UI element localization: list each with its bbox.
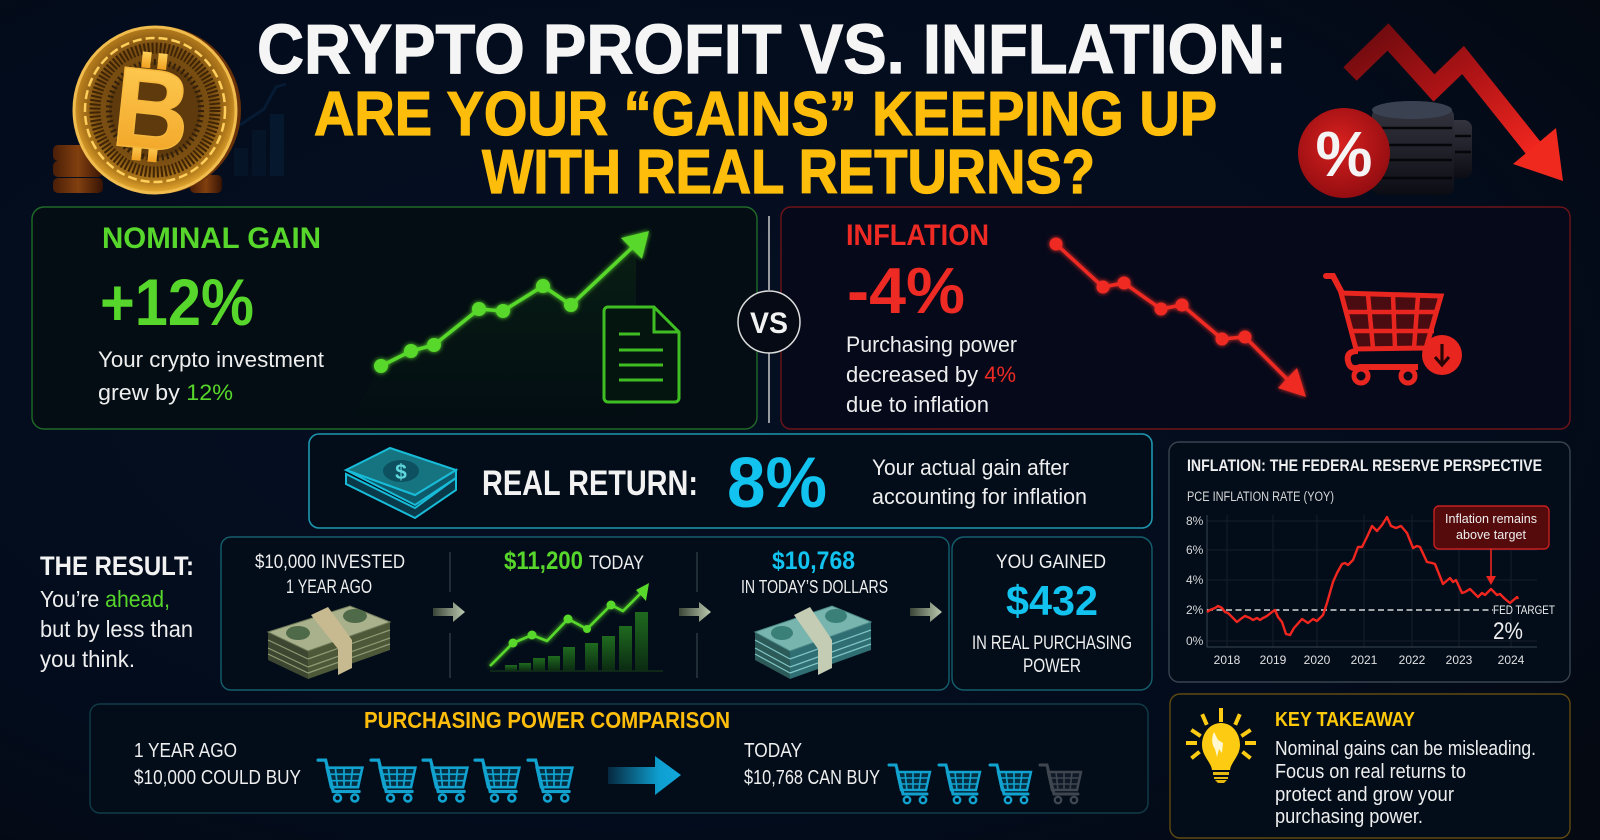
step: today's dollars: IN TODAY’S DOLLARS (741, 577, 888, 597)
chart: PCE line: 4% (1186, 573, 1204, 587)
chart: falling red line (1050, 238, 1306, 397)
header illustration: falling inflation (1298, 37, 1563, 198)
text: description (98, 347, 324, 405)
arrow: step one (433, 602, 465, 622)
number: -4%: -4% (847, 254, 965, 327)
text: chart subtitle: PCE INFLATION RATE (YOY) (1187, 489, 1334, 504)
icon: teal cash stack (755, 606, 871, 679)
label: real return: REAL RETURN: (482, 464, 698, 503)
number: $432: $432 (1006, 577, 1098, 624)
panel: inflation (781, 207, 1570, 429)
icon: green cash stack (268, 606, 390, 679)
text: today: $10,768 CAN BUY (744, 767, 880, 789)
callout: inflation remains above target: Inflation remains (1445, 512, 1537, 526)
text: description: Your crypto investment (98, 347, 324, 372)
heading: purchasing power: PURCHASING POWER COMPARISON (364, 707, 730, 733)
panel: real return (309, 434, 1152, 528)
text: takeaway body: Focus on real returns to (1275, 761, 1466, 783)
chart: PCE line: 2024 (1498, 653, 1525, 667)
chart: PCE line: 2020 (1304, 653, 1331, 667)
heading: nominal gain: NOMINAL GAIN (102, 222, 321, 255)
icon: document (604, 307, 679, 402)
title: CRYPTO PROFIT VS. INFLATION: (257, 10, 1287, 88)
panel: you gained: YOU GAINED (996, 552, 1106, 573)
callout: inflation remains above target: above target (1456, 528, 1527, 542)
icon: percent coin: % (1316, 118, 1372, 190)
text: one year ago (134, 740, 301, 789)
heading: key takeaway: KEY TAKEAWAY (1275, 709, 1416, 731)
text: description: grew by 12% (98, 380, 233, 405)
vs divider (738, 216, 800, 423)
step: invested (255, 552, 405, 679)
icon: dark coin stacks (1372, 101, 1472, 195)
icon: cyan cash: $ (395, 461, 407, 484)
panel: you gained: IN REAL PURCHASING (972, 633, 1132, 654)
label: fed target (1493, 603, 1556, 645)
step: invested: 1 YEAR AGO (286, 577, 372, 598)
arrow: step two (679, 602, 711, 622)
text: description (872, 455, 1087, 509)
text: description: Your actual gain after (872, 455, 1069, 480)
text: today: TODAY (744, 740, 802, 762)
text: one year ago: 1 YEAR AGO (134, 740, 237, 762)
text: takeaway body: protect and grow your (1275, 784, 1454, 806)
chart: rising green line (350, 231, 649, 420)
icon: shopping cart with down arrow (1326, 276, 1462, 383)
header illustration: bitcoin (53, 26, 286, 194)
panel: key takeaway (1170, 694, 1570, 838)
panel: purchasing power comparison (90, 704, 1148, 813)
panel: nominal gain (32, 207, 757, 429)
vs divider: VS (750, 307, 788, 340)
chart: PCE line: 2022 (1399, 653, 1426, 667)
arrow: step three (910, 602, 942, 622)
text: takeaway body: purchasing power. (1275, 806, 1423, 828)
step: today: TODAY (589, 553, 644, 574)
text: the result (40, 551, 194, 672)
label: fed target: FED TARGET (1493, 603, 1556, 617)
title: WITH REAL RETURNS? (482, 138, 1095, 207)
arrow: to today (608, 756, 681, 795)
icon: copper coin stacks (53, 145, 222, 193)
text: description: Purchasing power (846, 332, 1017, 357)
text: the result: you think. (40, 646, 135, 672)
chart: PCE line: 2021 (1351, 653, 1378, 667)
chart: PCE line: 8% (1186, 514, 1204, 528)
callout: inflation remains above target (1434, 506, 1549, 585)
icon: faint bars behind coin (234, 84, 286, 176)
panel: federal reserve chart (1169, 442, 1570, 682)
number: 8%: 8% (727, 444, 827, 523)
chart: PCE line: 2% (1186, 603, 1204, 617)
text: the result: You’re ahead, (40, 586, 170, 612)
title (257, 10, 1287, 207)
chart: PCE line: 2018 (1214, 653, 1241, 667)
panel: result flow (221, 537, 949, 690)
icon: cyan cash (346, 448, 456, 518)
icon: bitcoin coin (74, 26, 241, 194)
step: today (490, 547, 663, 671)
text: one year ago: $10,000 COULD BUY (134, 767, 301, 789)
heading: inflation: INFLATION (846, 219, 989, 252)
text: today (744, 740, 880, 789)
icons: five carts (318, 760, 572, 801)
text: takeaway body (1275, 738, 1536, 828)
arrow: red zigzag down (1350, 37, 1563, 181)
text: takeaway body: Nominal gains can be misleading. (1275, 738, 1536, 760)
text: description: accounting for inflation (872, 484, 1087, 509)
number: +12%: +12% (100, 265, 254, 339)
title: ARE YOUR “GAINS” KEEPING UP (314, 80, 1217, 149)
icon: bitcoin coin: B (107, 43, 196, 177)
chart: candles and rising line (490, 583, 663, 671)
chart: PCE line (1186, 514, 1537, 667)
chart: PCE line: 2019 (1260, 653, 1287, 667)
chart: PCE line: 6% (1186, 543, 1204, 557)
icon: light bulb (1188, 710, 1254, 783)
chart: PCE line: 2023 (1446, 653, 1473, 667)
step: today: $11,200 (504, 547, 583, 575)
panel: you gained (952, 537, 1152, 690)
step: invested: $10,000 INVESTED (255, 552, 405, 573)
icon: percent coin (1298, 108, 1390, 198)
step: today's dollars: $10,768 (772, 547, 855, 575)
text: the result: THE RESULT: (40, 551, 194, 581)
step: today's dollars (741, 547, 888, 679)
text: description: due to inflation (846, 392, 989, 417)
label: fed target: 2% (1493, 618, 1523, 645)
text: description: decreased by 4% (846, 362, 1016, 387)
icons: three full carts and one empty (889, 765, 1081, 803)
panel: you gained: POWER (1023, 656, 1081, 677)
text: description (846, 332, 1017, 417)
text: the result: but by less than (40, 616, 193, 642)
chart: PCE line: 0% (1186, 634, 1204, 648)
